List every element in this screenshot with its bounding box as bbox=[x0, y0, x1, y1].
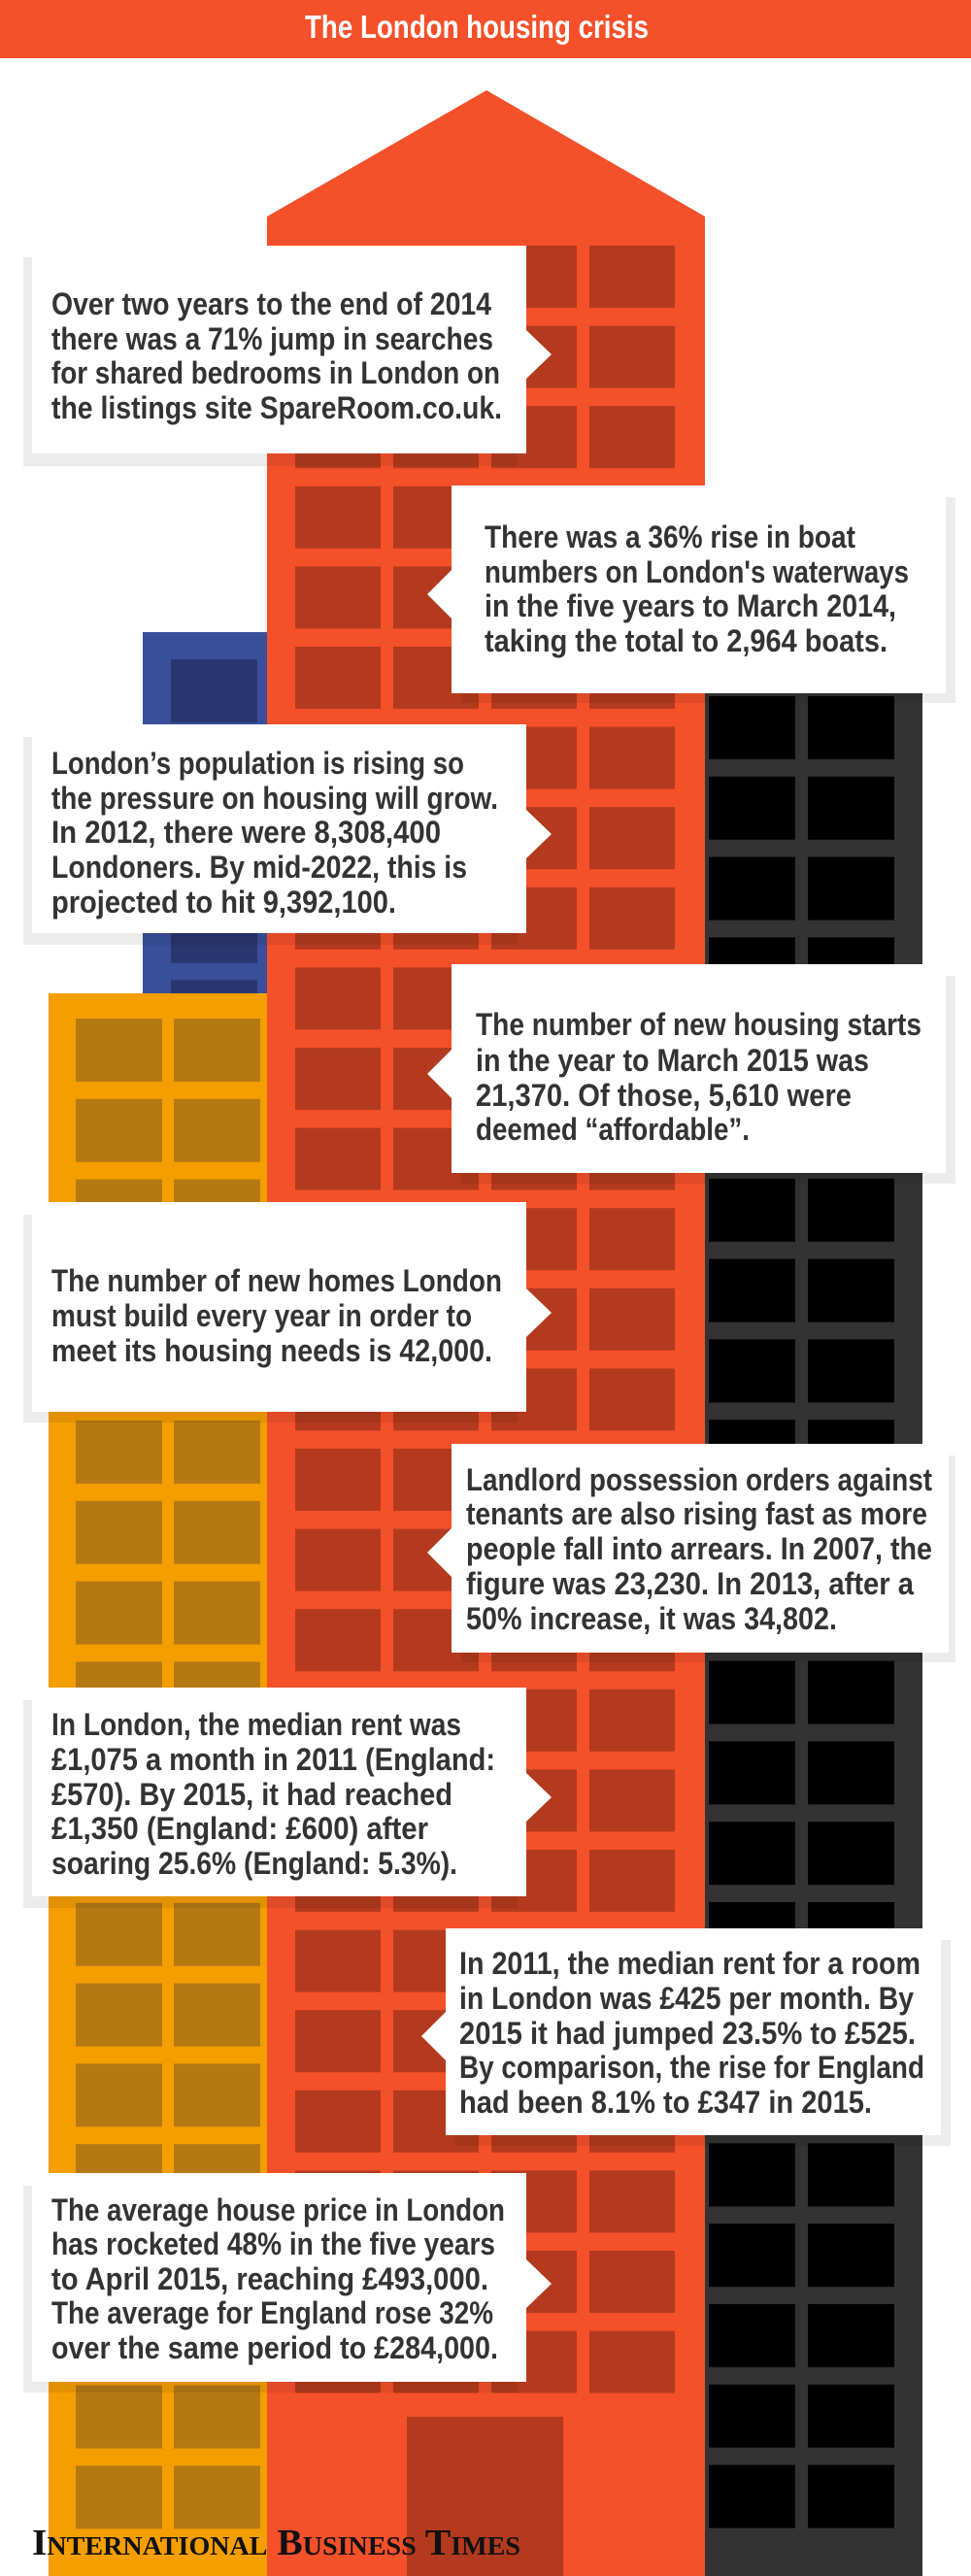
callout 1: SpareRoom searches bbox=[23, 246, 552, 466]
callout 2: boats: There was a 36% rise in boat bbox=[485, 519, 855, 554]
callout 7: median rent: £1,350 (England: £600) after bbox=[51, 1811, 428, 1846]
callout 2: boats: taking the total to 2,964 boats. bbox=[485, 623, 887, 658]
callout 5: homes needed: must build every year in order to bbox=[51, 1298, 472, 1333]
callout 1: SpareRoom searches: the listings site SpareRoom.co.uk. bbox=[51, 390, 502, 425]
building: dark bbox=[704, 691, 922, 2576]
callout 9: house prices: over the same period to £284,000. bbox=[51, 2330, 498, 2365]
callout 4: housing starts: deemed “affordable”. bbox=[476, 1112, 750, 1147]
callout 8: room rent bbox=[421, 1928, 951, 2146]
callout 7: median rent: £1,075 a month in 2011 (England: bbox=[51, 1742, 495, 1777]
callout 9: house prices bbox=[23, 2173, 552, 2392]
callout 4: housing starts: The number of new housing starts bbox=[476, 1007, 921, 1042]
door bbox=[407, 2417, 563, 2576]
callout 3: population: In 2012, there were 8,308,400 bbox=[51, 815, 441, 850]
callout 3: population: Londoners. By mid-2022, this is bbox=[51, 850, 467, 885]
callout 6: possession orders: figure was 23,230. In 2013, after a bbox=[466, 1566, 914, 1601]
callout 5: homes needed: The number of new homes London bbox=[51, 1263, 502, 1298]
callout 4: housing starts: 21,370. Of those, 5,610 were bbox=[476, 1078, 852, 1113]
logo: International Business Times: International Business Times bbox=[32, 2523, 520, 2563]
callout 3: population: London’s population is rising so bbox=[51, 746, 464, 781]
callout 9: house prices: to April 2015, reaching £493,000. bbox=[51, 2261, 488, 2296]
callout 1: SpareRoom searches: for shared bedrooms in London on bbox=[51, 355, 500, 390]
callout 2: boats bbox=[427, 485, 955, 703]
callout 6: possession orders: 50% increase, it was 34,802. bbox=[466, 1601, 837, 1636]
header bar bbox=[0, 0, 971, 58]
callout 3: population bbox=[23, 724, 552, 945]
callout 1: SpareRoom searches: Over two years to the end of 2014 bbox=[51, 286, 491, 321]
callout 6: possession orders: people fall into arrears. In 2007, the bbox=[466, 1531, 932, 1566]
callout 7: median rent bbox=[23, 1688, 552, 1908]
callout 1: SpareRoom searches: there was a 71% jump in searches bbox=[51, 321, 493, 356]
callout 7: median rent: soaring 25.6% (England: 5.3%). bbox=[51, 1846, 457, 1881]
callout 6: possession orders bbox=[427, 1444, 955, 1662]
callout 8: room rent: in London was £425 per month. By bbox=[459, 1981, 914, 2016]
building: yellow bbox=[49, 993, 267, 2576]
callout 5: homes needed bbox=[23, 1202, 552, 1422]
callout 7: median rent: £570). By 2015, it had reached bbox=[51, 1777, 452, 1812]
callout 3: population: projected to hit 9,392,100. bbox=[51, 885, 396, 920]
callout 9: house prices: The average house price in London bbox=[51, 2192, 505, 2227]
callout 5: homes needed: meet its housing needs is 42,000. bbox=[51, 1333, 492, 1368]
callout 4: housing starts: in the year to March 2015 was bbox=[476, 1043, 869, 1078]
callout 9: house prices: The average for England rose 32% bbox=[51, 2295, 493, 2330]
callout 7: median rent: In London, the median rent was bbox=[51, 1707, 461, 1742]
callout 8: room rent: 2015 it had jumped 23.5% to £525. bbox=[459, 2016, 916, 2051]
building: blue bbox=[143, 632, 267, 993]
callout 8: room rent: had been 8.1% to £347 in 2015. bbox=[459, 2085, 872, 2120]
callout 2: boats: numbers on London's waterways bbox=[485, 554, 909, 589]
building: orange tower bbox=[267, 90, 705, 2576]
callout 9: house prices: has rocketed 48% in the five years bbox=[51, 2226, 495, 2261]
title: The London housing crisis bbox=[305, 9, 649, 45]
callout 4: housing starts bbox=[427, 964, 955, 1184]
callout 2: boats: in the five years to March 2014, bbox=[485, 588, 896, 623]
callout 3: population: the pressure on housing will grow. bbox=[51, 781, 498, 816]
callout 8: room rent: In 2011, the median rent for a room bbox=[459, 1946, 921, 1981]
